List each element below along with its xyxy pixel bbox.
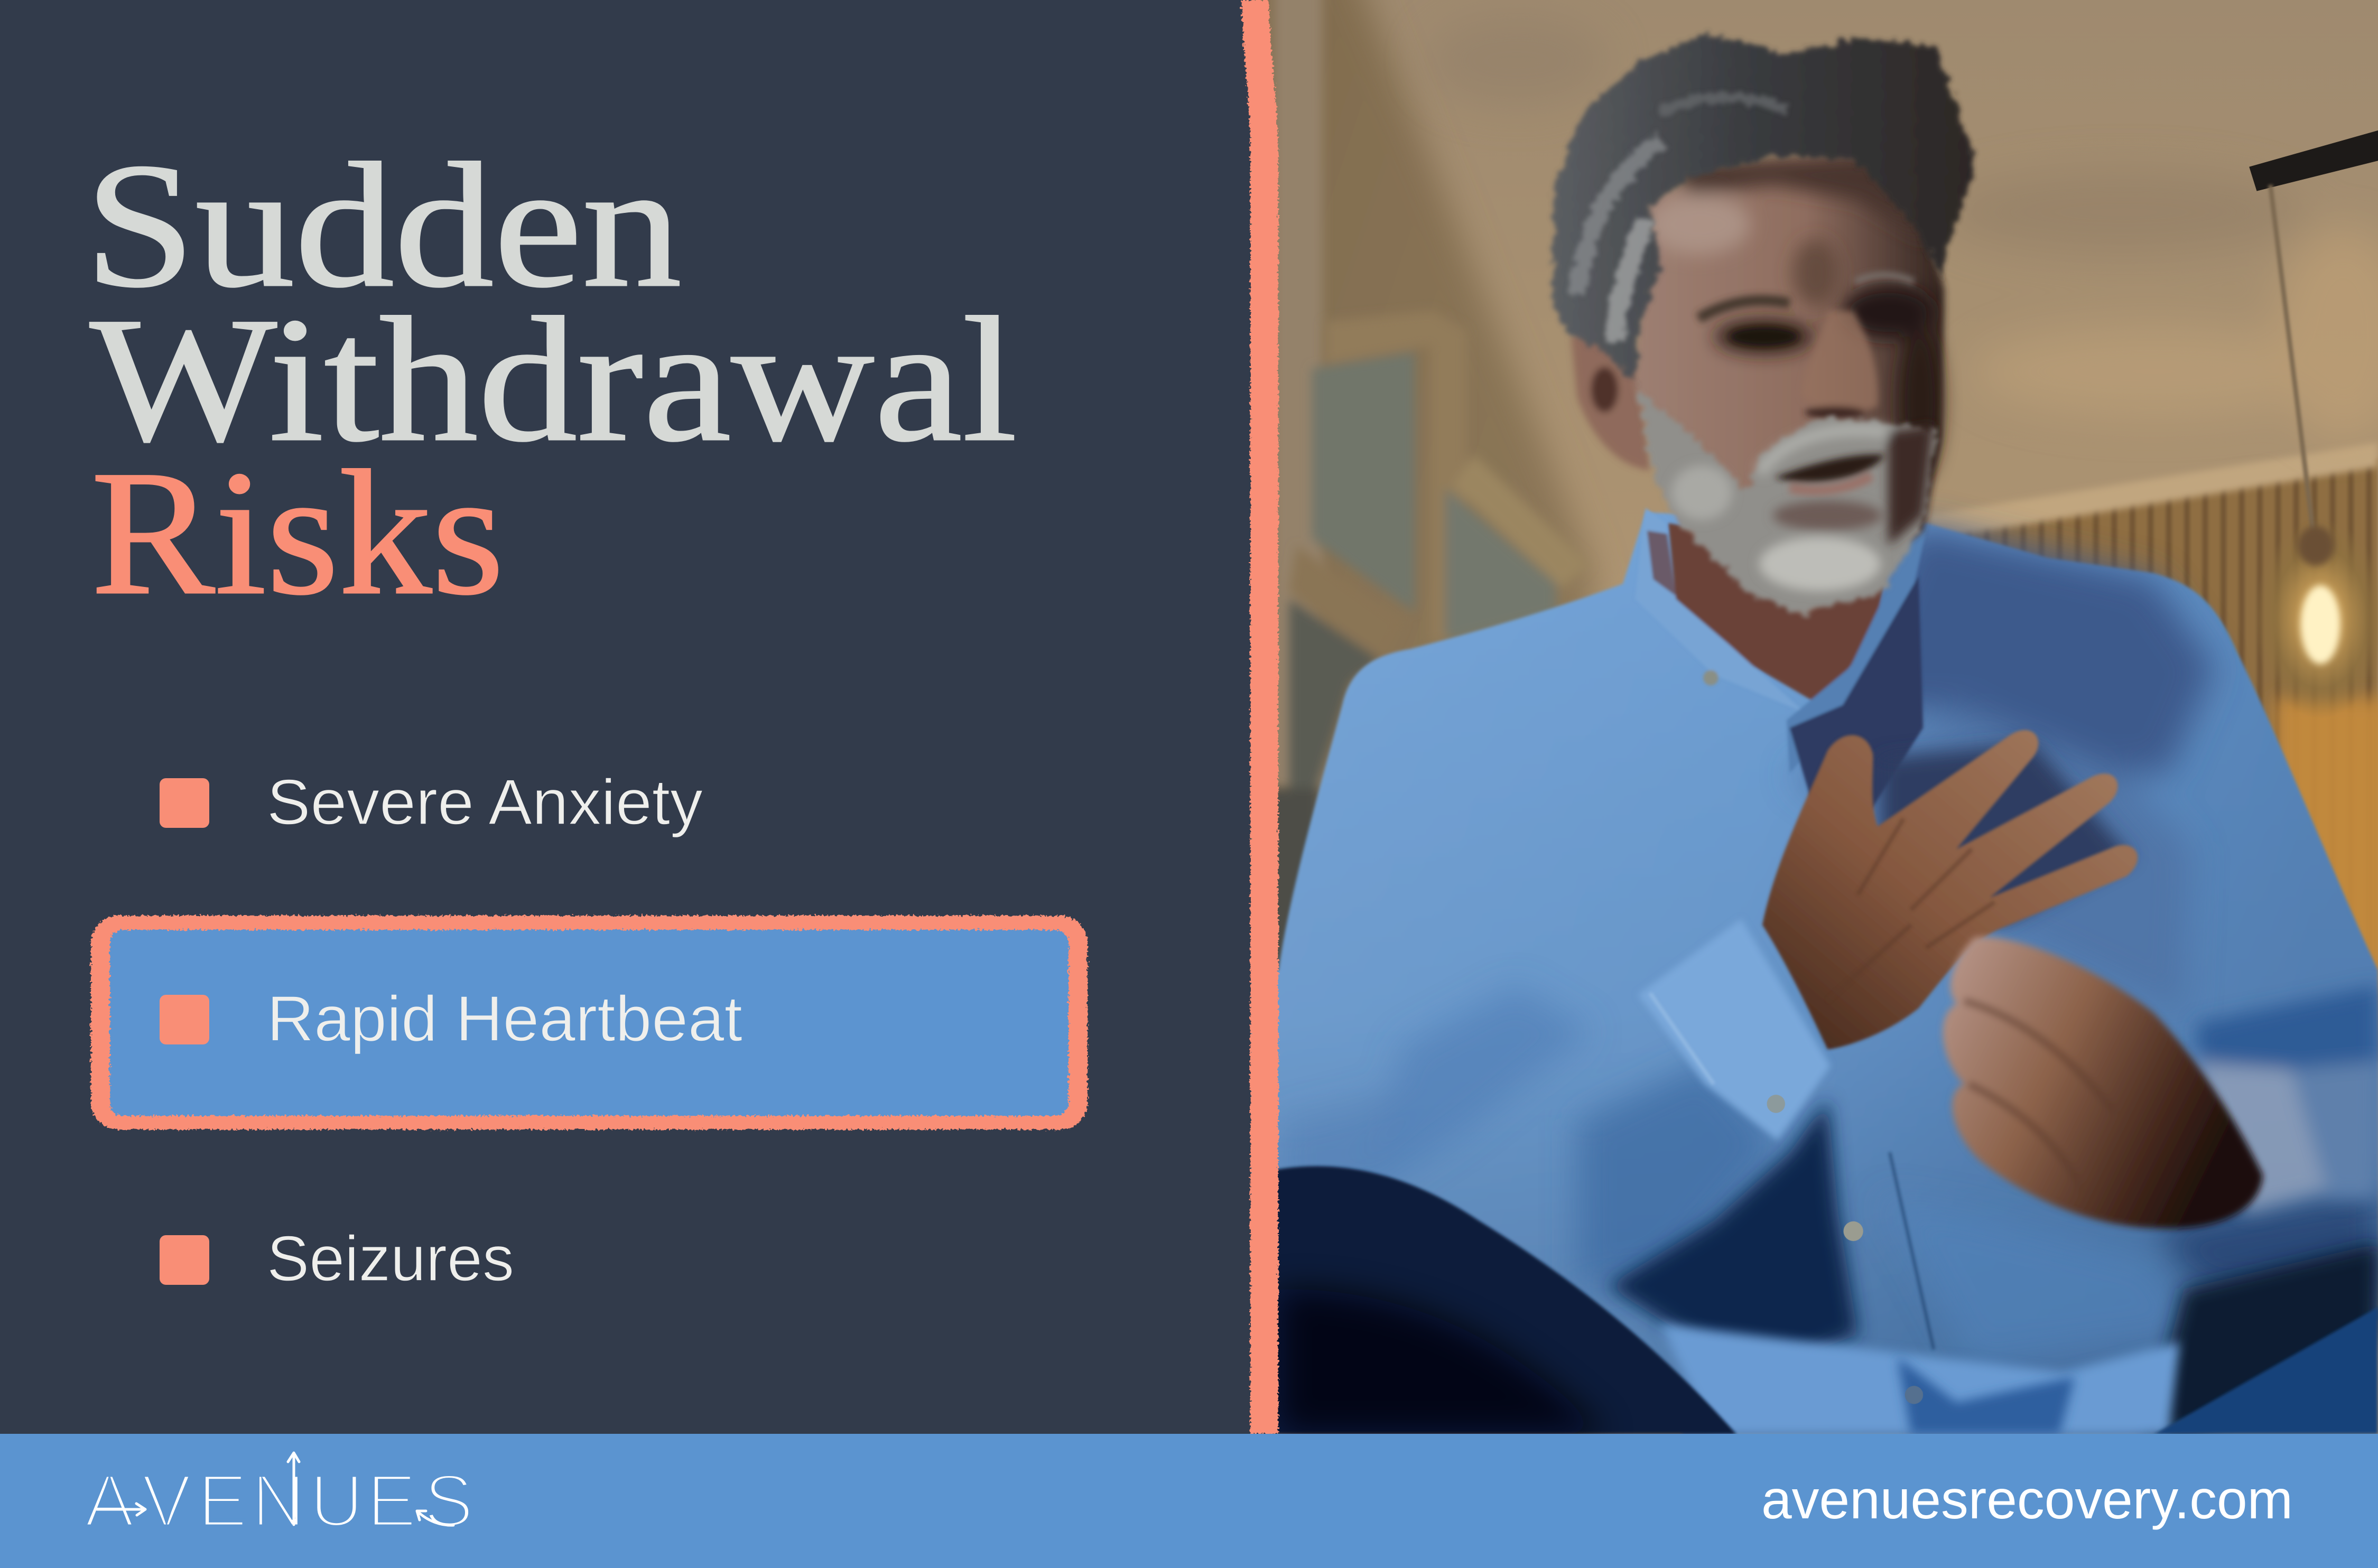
photo: man holding his chest: [1251, 0, 2378, 1434]
title line: Risks: Risks: [91, 434, 504, 632]
list item: Rapid Heartbeat (highlighted): [91, 916, 1088, 1130]
logo arrows: [97, 1453, 453, 1525]
photo: hair: [1553, 33, 1976, 382]
photo: trousers: [1251, 1166, 2378, 1434]
photo: hand on chest: [1762, 730, 2138, 1049]
photo: pendant lamp: [2249, 130, 2378, 718]
vertical salmon divider stripe: [1241, 0, 1278, 1434]
photo: lower hand: [1943, 937, 2263, 1228]
photo: neck and collar: [1635, 508, 1926, 819]
bullet: [160, 1235, 209, 1285]
photo: shirttail: [1659, 1324, 2179, 1434]
logo: AVENUES: [85, 1453, 473, 1542]
photo: face shading: [1647, 156, 1942, 478]
footer bar: [0, 1434, 2378, 1568]
photo: nose: [1802, 311, 1878, 412]
label: Seizures: [267, 1222, 514, 1294]
website url: avenuesrecovery.com: [1761, 1469, 2293, 1530]
photo: shirt: [1251, 512, 2378, 1434]
logo wordmark: AVENUES: [85, 1459, 473, 1542]
bullet: [160, 995, 209, 1044]
label: Rapid Heartbeat: [267, 983, 742, 1054]
title: [85, 127, 1017, 632]
photo: face: [1635, 157, 1944, 614]
photo: room background: [1251, 0, 2378, 1434]
title line: Withdrawal: Withdrawal: [90, 281, 1017, 479]
photo: shirt shadows and folds: [1278, 523, 2378, 1434]
photo: beard: [1638, 390, 1937, 614]
photo: mouth: [1775, 454, 1885, 491]
photo: cuff and buttons: [1638, 919, 1934, 1404]
photo: head: [1553, 33, 1976, 614]
label: Severe Anxiety: [267, 766, 703, 838]
photo: eyes and brows: [1698, 301, 1790, 319]
highlight box: [91, 916, 1088, 1130]
list item: Seizures: [160, 1222, 514, 1294]
list item: Severe Anxiety: [160, 766, 703, 838]
photo: ear: [1571, 333, 1650, 470]
bullet: [160, 778, 209, 828]
title line: Sudden: Sudden: [85, 127, 682, 324]
